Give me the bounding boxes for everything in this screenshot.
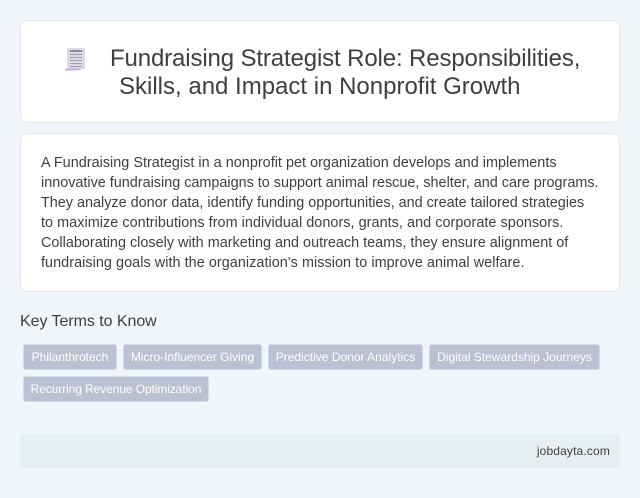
footer source label: jobdayta.com xyxy=(537,444,610,458)
tag: Digital Stewardship Journeys xyxy=(429,344,600,370)
text block: role description: A Fundraising Strategist in a nonprofit pet organization develops and implements xyxy=(41,155,557,171)
panel: title card xyxy=(20,20,620,123)
title xyxy=(110,45,580,100)
tag: Digital Stewardship Journeys: Digital Stewardship Journeys xyxy=(437,350,592,364)
tag: Micro-Influencer Giving xyxy=(123,344,262,370)
text block: role description: fundraising goals with the organization's mission to improve animal welfare. xyxy=(41,255,524,271)
text block: role description: Collaborating closely with marketing and outreach teams, they ensure alignment of xyxy=(41,235,568,251)
tag: Recurring Revenue Optimization: Recurring Revenue Optimization xyxy=(31,382,201,396)
tag: Recurring Revenue Optimization xyxy=(23,376,209,402)
text block: role description xyxy=(41,155,599,271)
tag: Micro-Influencer Giving: Micro-Influencer Giving xyxy=(131,350,254,364)
panel: description card xyxy=(20,133,620,292)
text block: role description: to maximize contributions from individual donors, grants, and corporate sponsors. xyxy=(41,215,563,231)
title: Fundraising Strategist Role: Responsibilities, xyxy=(110,45,580,72)
title: Skills, and Impact in Nonprofit Growth xyxy=(119,73,520,100)
footer bar xyxy=(20,434,620,468)
tag: Predictive Donor Analytics: Predictive Donor Analytics xyxy=(276,350,415,364)
tag: Philanthrotech xyxy=(23,344,117,370)
text block: role description: innovative fundraising campaigns to support animal rescue, shelter, and care programs. xyxy=(41,175,599,191)
heading: key terms: Key Terms to Know xyxy=(20,313,157,330)
text block: role description: They analyze donor data, identify funding opportunities, and create tailored strategies xyxy=(41,195,584,211)
tag list xyxy=(23,344,600,402)
tag: Predictive Donor Analytics xyxy=(268,344,423,370)
tag: Philanthrotech: Philanthrotech xyxy=(32,350,108,364)
icon: document scroll xyxy=(65,48,85,71)
